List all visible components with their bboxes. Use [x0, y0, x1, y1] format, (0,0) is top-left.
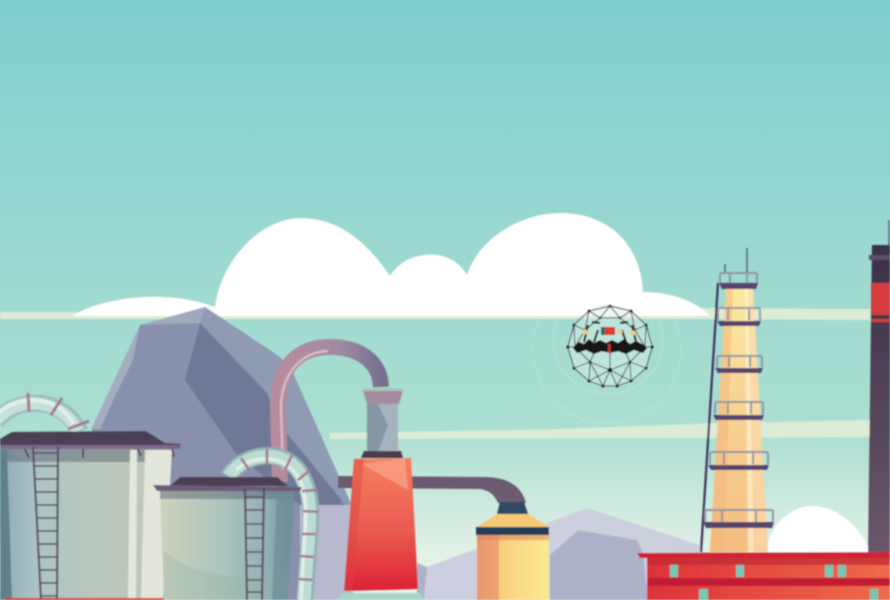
striped tower [701, 248, 774, 552]
tower antennas [725, 248, 747, 272]
mauve arched pipe [278, 347, 381, 482]
service ladder rail [701, 283, 718, 552]
furnace connector pipe [338, 476, 526, 503]
tall dark chimney [868, 220, 890, 552]
red factory building [637, 552, 890, 600]
drone halo [569, 305, 651, 387]
signal rings [533, 316, 681, 423]
cloud behind chimney [766, 506, 870, 552]
inspection drone [533, 305, 681, 423]
tank brackets [25, 449, 174, 458]
pipe arch right [228, 449, 318, 600]
wireframe cage [568, 306, 652, 386]
tower shaft [710, 288, 768, 552]
drone body [573, 322, 647, 354]
storage tank middle [153, 449, 318, 600]
storage tank left [0, 393, 181, 600]
red furnace [336, 388, 425, 600]
horizon haze bands [0, 308, 870, 439]
ladder left [33, 447, 58, 600]
clouds [72, 213, 710, 316]
cage nodes [566, 305, 654, 387]
pipe arch left [0, 393, 89, 432]
ladder middle [245, 488, 264, 600]
distant mountains [417, 508, 700, 600]
building windows [670, 565, 878, 600]
large mountain [80, 307, 353, 600]
yellow tank [476, 502, 549, 600]
tower platforms [703, 273, 774, 528]
